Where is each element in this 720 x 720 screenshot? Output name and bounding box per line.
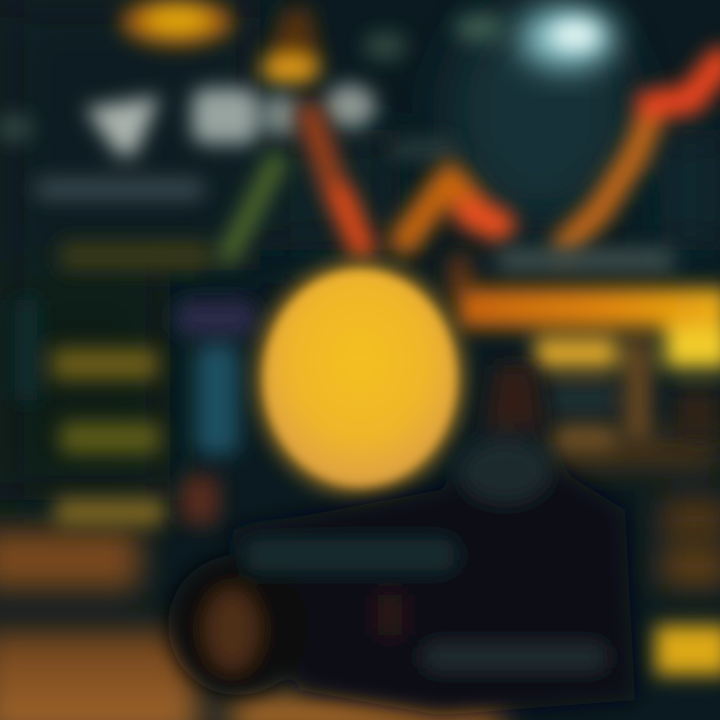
overhead lamps xyxy=(121,0,322,84)
red and orange chart line xyxy=(310,62,720,248)
pale band behind chart xyxy=(448,248,675,295)
green line and text rows xyxy=(15,155,280,526)
gold coin xyxy=(256,262,464,494)
dark camera xyxy=(168,365,635,715)
yellow shelf at right xyxy=(458,288,720,675)
figure beside coin xyxy=(175,300,257,525)
white blurred headline shapes xyxy=(35,84,458,200)
background tones xyxy=(0,0,720,500)
wooden table and lower warm areas xyxy=(0,440,720,720)
glowing light top right xyxy=(520,8,616,68)
